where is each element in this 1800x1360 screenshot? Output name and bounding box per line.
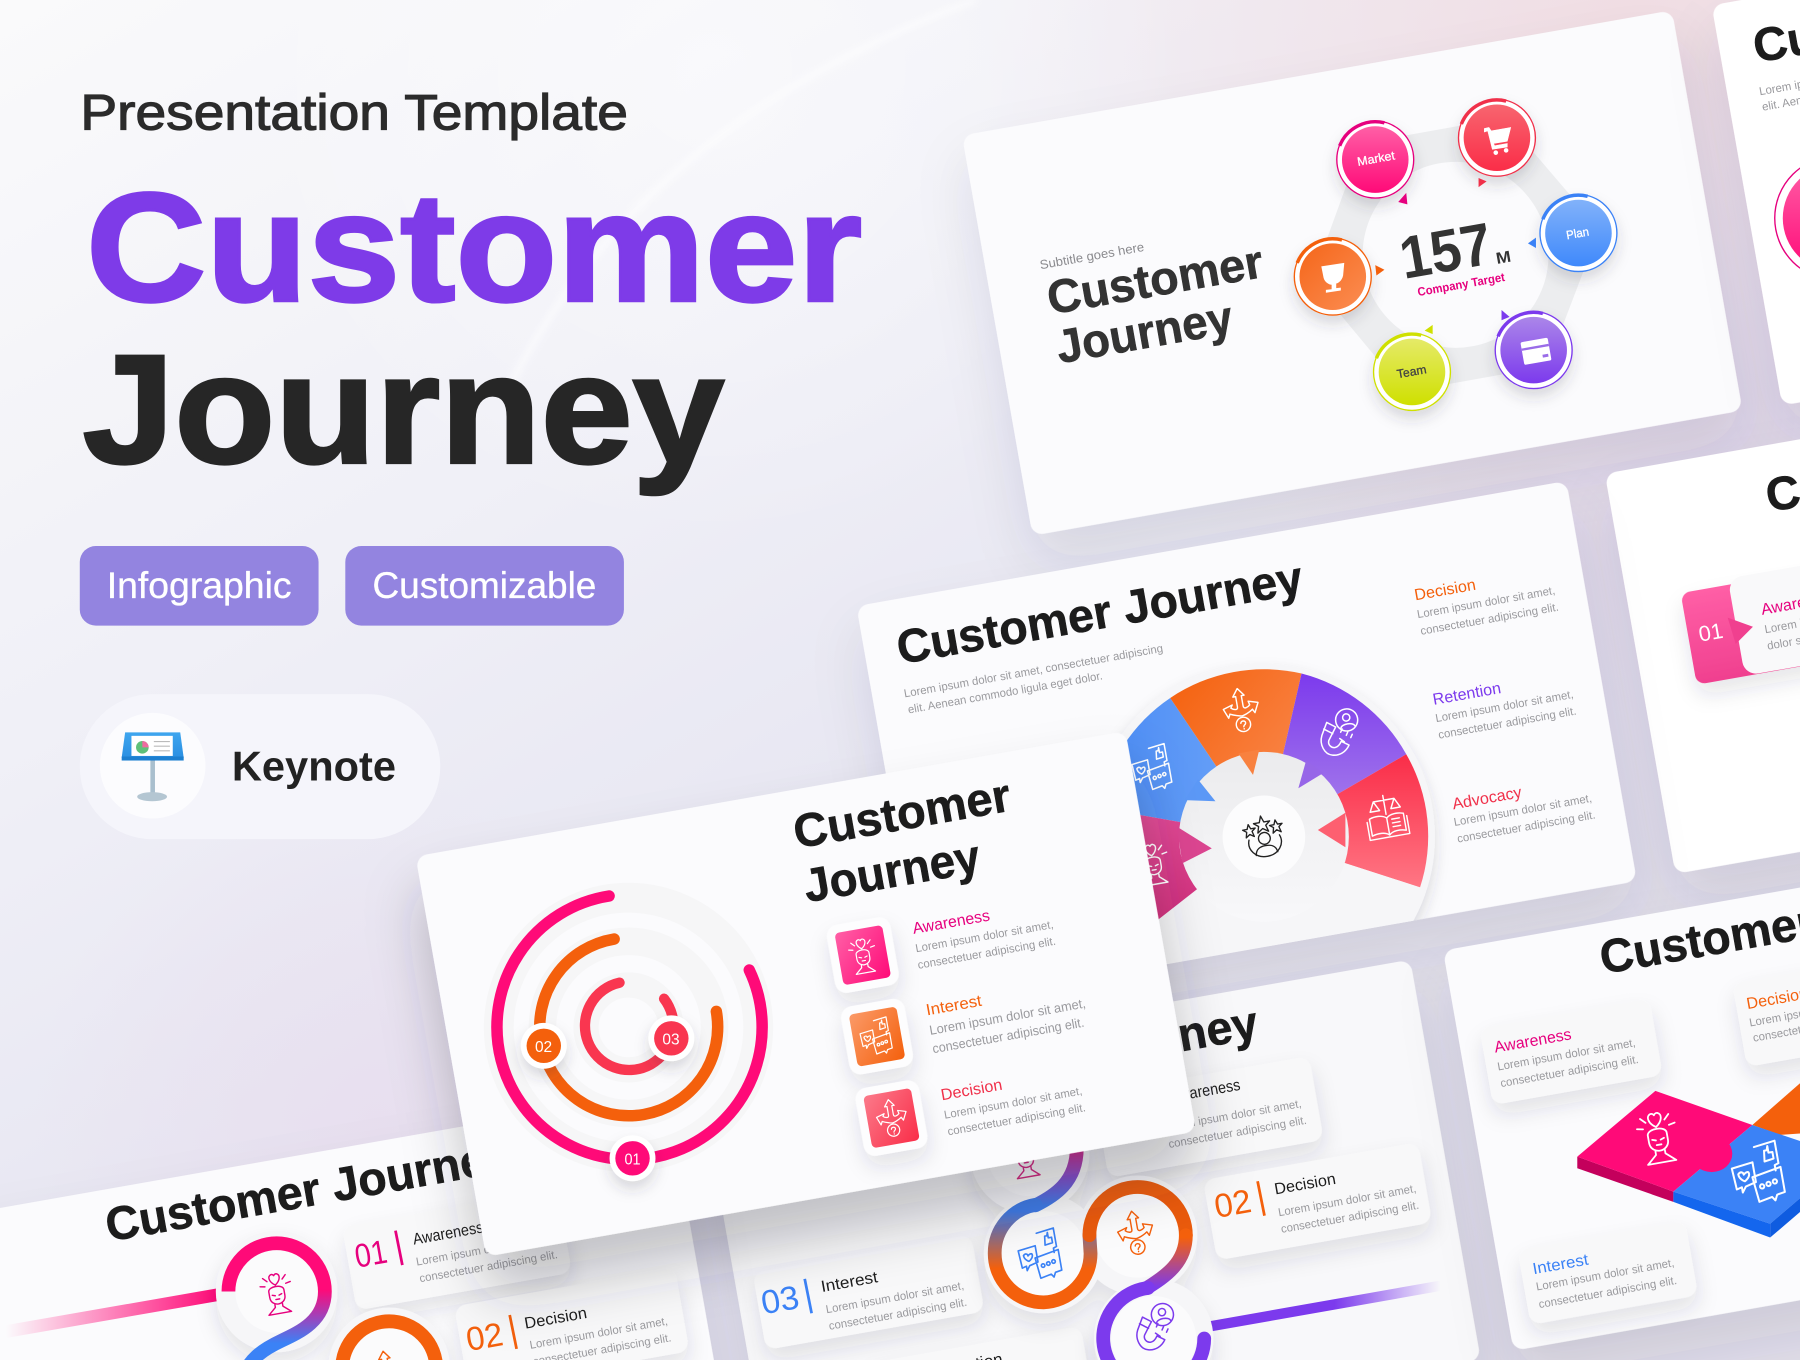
box: 02 decision <box>1203 1142 1432 1260</box>
box: 02 decision: Decision <box>523 1304 588 1333</box>
item: interest text: Interest <box>925 992 984 1019</box>
item: decision <box>1413 576 1560 638</box>
icon: arrows <box>366 1348 408 1360</box>
heading: customer journey <box>789 768 1014 912</box>
box: 01 awareness: Awareness <box>411 1218 485 1249</box>
intro text: Lorem ipsum dolor sit amet, consectetuer adipiscing <box>903 643 1164 700</box>
title: customer: Customer <box>86 161 862 334</box>
icon: cart <box>1484 127 1511 149</box>
badge 03 <box>648 1015 694 1061</box>
item: awareness text: Awareness <box>911 907 991 938</box>
metric: 157 M: M <box>1495 248 1512 268</box>
icon: trophy <box>1321 263 1344 293</box>
node: trophy <box>1294 238 1372 316</box>
icon: head <box>1016 1160 1041 1180</box>
badge 01 <box>610 1135 655 1181</box>
heading: presentation template: Presentation Template <box>80 84 628 141</box>
icon: keynote lectern <box>122 732 184 801</box>
heading: customer journey: Customer <box>789 768 1014 858</box>
box: retention <box>866 1326 1094 1360</box>
item: awareness text: Lorem ipsum dolor sit amet, <box>915 919 1055 955</box>
box: 03 interest: consectetuer adipiscing elit. <box>828 1297 968 1333</box>
metric: 157 M: 157 <box>1395 210 1497 292</box>
item: advocacy <box>1451 783 1596 846</box>
box: 02 decision: consectetuer adipiscing elit. <box>1280 1200 1420 1236</box>
node: team <box>1373 333 1451 411</box>
panel: top slide with company target <box>962 10 1743 536</box>
heading: customer journey: Journey <box>1052 290 1237 373</box>
title: journey: Journey <box>83 323 724 496</box>
item: decision icon tile <box>854 1079 929 1158</box>
box: 01 awareness: 01 <box>352 1234 390 1276</box>
box: 02 decision: Decision <box>1273 1170 1337 1198</box>
box: awareness: Lorem ipsum dolor sit amet, <box>1162 1098 1302 1134</box>
item: retention: consectetuer adipiscing elit. <box>1437 706 1577 742</box>
node discs <box>967 1150 1219 1360</box>
box: awareness <box>1479 998 1663 1105</box>
box: interest: consectetuer adipiscing elit. <box>1538 1275 1678 1311</box>
step 01 block: 01 <box>1697 618 1725 647</box>
icon: head <box>1635 1110 1681 1166</box>
icon: head <box>258 1272 295 1316</box>
badge: keynote <box>80 694 440 839</box>
tag: customizable: Customizable <box>373 564 596 606</box>
tag: infographic <box>80 546 319 626</box>
box: awareness: Awareness <box>1168 1076 1242 1106</box>
box: 01 awareness: consectetuer adipiscing elit. <box>419 1249 559 1285</box>
box: interest: Interest <box>1531 1251 1590 1278</box>
icon: scale and book <box>1363 792 1410 840</box>
box: 03 interest: Interest <box>820 1268 880 1296</box>
item: retention: Lorem ipsum dolor sit amet, <box>1435 689 1575 725</box>
intro text: elit. Aenean commodo ligula eget dolor. <box>907 670 1104 716</box>
heading: customer journey: Journey <box>800 829 984 912</box>
box: awareness: consectetuer adipiscing elit. <box>1168 1115 1308 1151</box>
icon: chat bubbles <box>1015 1228 1063 1282</box>
item: retention: Retention <box>1431 679 1502 709</box>
heading: customer journey: Customer <box>1043 234 1267 324</box>
box: 02 decision: 02 <box>463 1316 506 1359</box>
ring 03 <box>585 983 673 1070</box>
icon: magnet <box>1136 1302 1174 1351</box>
item: advocacy: Lorem ipsum dolor sit amet, <box>1453 793 1593 829</box>
box: decision <box>1732 945 1800 1067</box>
item: decision: consectetuer adipiscing elit. <box>1420 602 1560 638</box>
chart: s-curve path <box>970 1094 1441 1360</box>
icon: chat bubbles <box>1129 743 1173 793</box>
heading: customer journey <box>1043 234 1267 373</box>
badge 02 <box>521 1023 567 1069</box>
box: 02 decision <box>454 1268 689 1360</box>
item: decision: Lorem ipsum dolor sit amet, <box>1416 585 1556 621</box>
item: advocacy: Advocacy <box>1451 783 1523 813</box>
tag: customizable <box>345 546 624 626</box>
node: cart <box>1458 99 1536 177</box>
box: awareness: Awareness <box>1493 1025 1573 1057</box>
box: 02 decision: 02 <box>1212 1183 1254 1226</box>
box: awareness: Lorem ipsum dolor sit amet, <box>1497 1037 1637 1073</box>
badge 03: 03 <box>662 1031 680 1049</box>
box: awareness <box>1094 1056 1324 1178</box>
box: 03 interest <box>753 1235 984 1350</box>
icon: stars and person <box>1242 815 1283 858</box>
hub ring <box>1333 138 1578 372</box>
icon: chat bubbles <box>1728 1140 1786 1207</box>
item: advocacy: consectetuer adipiscing elit. <box>1456 809 1596 846</box>
label: company target: Company Target <box>1416 270 1506 299</box>
item: awareness text: consectetuer adipiscing elit. <box>917 936 1057 972</box>
icon: arrows <box>1116 1210 1154 1255</box>
box: 03 interest: Lorem ipsum dolor sit amet, <box>825 1280 965 1316</box>
chart: journey wheel <box>1121 669 1441 946</box>
tag: infographic: Infographic <box>107 564 292 606</box>
chart: concentric rings <box>497 896 762 1181</box>
box: 02 decision: Lorem ipsum dolor sit amet, <box>529 1316 669 1352</box>
box: 03 interest: 03 <box>758 1279 802 1322</box>
box: interest: Lorem ipsum dolor sit amet, <box>1535 1257 1675 1293</box>
item: awareness icon tile <box>825 916 900 995</box>
icon: head <box>1146 844 1169 886</box>
item: interest icon tile <box>839 997 915 1076</box>
node: awareness ring <box>216 1231 338 1360</box>
icon: magnet <box>1320 708 1358 756</box>
panel: front slide with rings <box>416 731 1196 1257</box>
ring 01 <box>497 896 762 1160</box>
line: purple tail <box>1200 1286 1441 1328</box>
heading: Customer Journey <box>101 1128 515 1251</box>
node: team: Team <box>1396 362 1428 381</box>
item: interest text <box>925 992 1087 1056</box>
item: decision text: consectetuer adipiscing elit. <box>947 1102 1087 1138</box>
panel: wheel slide <box>856 481 1637 1010</box>
line: pink tail <box>6 1293 230 1332</box>
panel: right slide top partial <box>1712 0 1800 405</box>
heading: customer journey: Customer Journey <box>848 995 1262 1119</box>
step 01 block <box>1681 535 1800 685</box>
icon: payment card <box>1520 338 1552 365</box>
badge 01: 01 <box>624 1151 641 1169</box>
item: decision text: Decision <box>939 1076 1004 1104</box>
panel: puzzle slide <box>1443 825 1800 1351</box>
curve segments <box>995 1148 1204 1360</box>
panel: right slide middle partial <box>1605 348 1800 874</box>
item: decision text: Lorem ipsum dolor sit amet, <box>943 1086 1083 1122</box>
item: awareness text <box>911 907 1057 972</box>
subtitle: Subtitle goes here <box>1039 240 1145 272</box>
chart: isometric puzzle <box>1577 1068 1800 1238</box>
box: interest <box>1518 1221 1698 1325</box>
badge: keynote: Keynote <box>232 744 396 790</box>
box: 01 awareness: Lorem ipsum dolor sit amet, <box>415 1232 555 1269</box>
node: plan <box>1539 194 1617 272</box>
ring 02 <box>540 939 718 1116</box>
item: interest text: Lorem ipsum dolor sit amet, <box>928 996 1087 1038</box>
item: decision: Decision <box>1413 576 1477 604</box>
icon: orange arrows <box>1222 688 1259 732</box>
node: market <box>1336 121 1414 199</box>
panel: s-curve slide <box>700 960 1481 1360</box>
box: awareness: consectetuer adipiscing elit. <box>1500 1054 1640 1090</box>
panel: bottom left slide <box>0 1091 737 1360</box>
item: retention <box>1431 679 1577 742</box>
node: plan: Plan <box>1565 225 1590 242</box>
badge 02: 02 <box>535 1038 552 1056</box>
item: decision text <box>939 1076 1087 1138</box>
arrows: cycle markers <box>1375 178 1536 334</box>
node: payment card <box>1495 311 1573 389</box>
item: interest text: consectetuer adipiscing elit. <box>931 1015 1085 1056</box>
node: decision ring <box>328 1308 450 1360</box>
heading: customer journey: Customer Journey <box>893 550 1306 674</box>
node: market: Market <box>1356 148 1397 169</box>
box: 01 awareness <box>342 1189 572 1310</box>
box: 02 decision: Lorem ipsum dolor sit amet, <box>1277 1183 1417 1219</box>
